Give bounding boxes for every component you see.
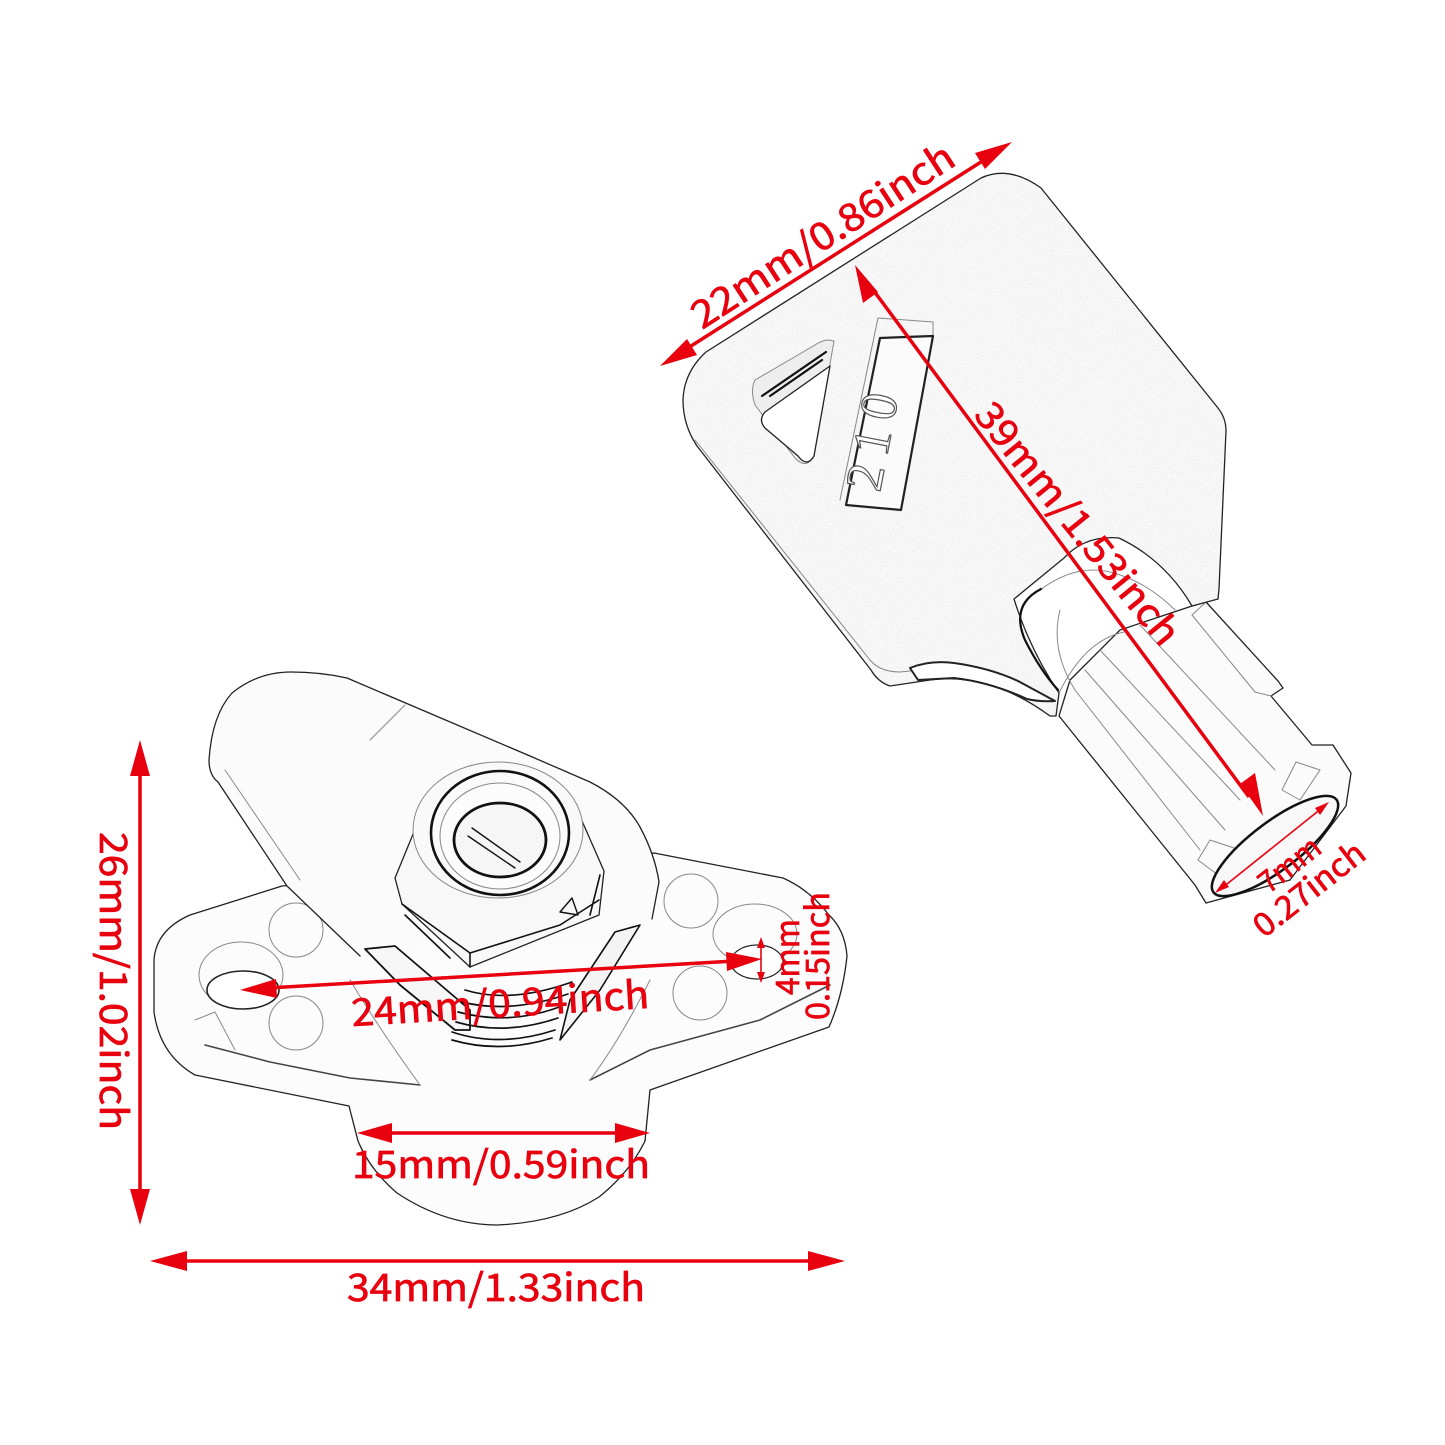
- groove: [910, 662, 1055, 701]
- lever arm: [209, 672, 659, 956]
- label: 22mm/0.86inch: [678, 127, 964, 339]
- mounting plate: [154, 853, 847, 1225]
- arrow: [130, 740, 150, 1225]
- label: 24mm/0.94inch: [350, 964, 650, 1037]
- illustration: key: [680, 170, 1351, 912]
- shoulder detail: [695, 440, 1175, 690]
- plate shading lines: [205, 985, 830, 1085]
- dimension: key tip diameter: [1215, 802, 1374, 947]
- arrow: [150, 1251, 845, 1271]
- dimension: overall width: [150, 1251, 845, 1312]
- label: 26mm/1.02inch: [89, 832, 144, 1130]
- arrow: [660, 142, 1012, 366]
- arrow: [855, 265, 1263, 816]
- stamped number plate: [836, 318, 933, 510]
- label: 15mm/0.59inch: [352, 1134, 650, 1189]
- plate dimples: [269, 874, 727, 1050]
- label: 39mm/1.53inch: [964, 388, 1196, 655]
- threaded section: [365, 925, 640, 1047]
- nut washer rings: [413, 762, 583, 898]
- label: 7mm: 7mm: [1247, 824, 1329, 902]
- key head: [683, 173, 1226, 716]
- arrow: [240, 952, 762, 998]
- dimension: key length: [855, 265, 1263, 816]
- hex nut: [395, 805, 604, 967]
- dimension: key head width: [660, 127, 1012, 366]
- key shaft: [1059, 602, 1351, 903]
- dimension: cylinder diameter: [352, 1123, 650, 1189]
- lock core: [454, 803, 546, 877]
- label: 34mm/1.33inch: [347, 1257, 645, 1312]
- label: 0.15inch: 0.15inch: [793, 892, 839, 1020]
- key tip ellipse: [1199, 780, 1351, 912]
- mounting hole left: [199, 942, 283, 1009]
- arrow: [357, 1123, 650, 1143]
- dimension: hole diameter: [757, 892, 839, 1020]
- arrow: [757, 937, 765, 983]
- arrow: [1215, 802, 1329, 893]
- dimension: mounting hole spacing: [240, 952, 762, 1037]
- illustration: lock cylinder with mounting plate: [154, 672, 847, 1225]
- mounting hole right: [713, 904, 797, 979]
- number 210: 210: [836, 378, 912, 495]
- label: 0.27inch: 0.27inch: [1242, 829, 1374, 947]
- label: 4mm: 4mm: [763, 919, 809, 995]
- triangular hole: [752, 340, 834, 464]
- dimension: overall height: [89, 740, 150, 1225]
